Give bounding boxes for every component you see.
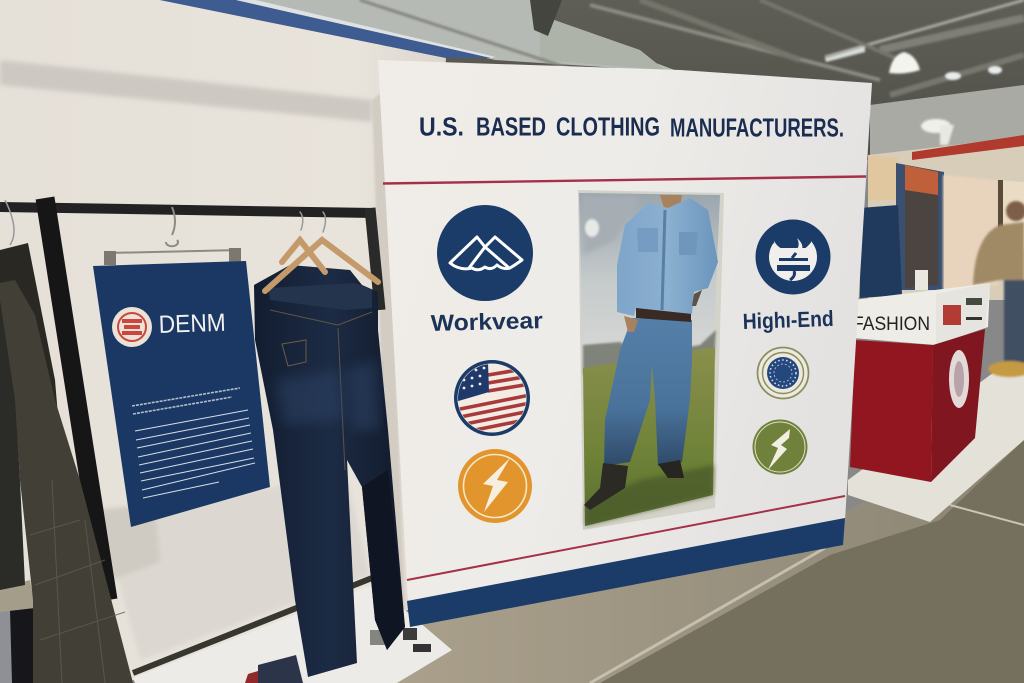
panel base strip <box>407 518 845 627</box>
hangers <box>265 212 378 291</box>
wall behind rack <box>0 0 446 683</box>
counter label: FASHION <box>853 314 930 335</box>
bottom red line <box>407 496 845 580</box>
clothing rack <box>0 198 380 673</box>
background: hall ceiling <box>0 0 1024 160</box>
poster: DENM <box>93 261 270 527</box>
hook and rod for poster <box>104 207 241 265</box>
logo badge <box>112 307 152 347</box>
man's neck <box>660 195 682 208</box>
hanging coat <box>0 200 133 683</box>
heading: MANUFACTURERS. <box>670 112 844 142</box>
main panel <box>378 60 872 627</box>
icon: orange bolt <box>458 449 532 523</box>
belt <box>636 306 691 322</box>
background: neighbouring booth <box>868 135 1024 300</box>
heading: U.S. <box>419 112 464 142</box>
shirt <box>617 198 718 316</box>
photo: man in denim <box>578 190 724 530</box>
poster text lines <box>132 388 255 498</box>
heading: BASED <box>476 112 546 142</box>
top red line <box>383 176 866 184</box>
display base <box>133 585 452 683</box>
background: floor <box>395 350 1024 683</box>
ceiling lamps <box>889 52 1002 145</box>
heading: CLOTHING <box>556 112 660 142</box>
trousers <box>604 318 692 466</box>
icon: high-end <box>756 220 830 294</box>
background: visitor <box>973 201 1024 377</box>
boots <box>584 463 628 510</box>
icon: US flag <box>454 360 530 436</box>
top banner on wall <box>160 0 496 58</box>
poster heading: DENM <box>158 309 226 339</box>
counter: fashion desk <box>850 205 990 482</box>
icon: workwear mountains <box>437 205 533 301</box>
icon: green bolt <box>752 420 808 474</box>
heading <box>419 112 844 142</box>
icon: seal <box>758 348 808 398</box>
hands <box>624 316 638 332</box>
background: far hall wall <box>870 85 1024 165</box>
label: workwear: Workvear <box>430 307 543 336</box>
jeans on hangers <box>254 212 405 677</box>
label: high-end: Highı-End <box>742 306 834 334</box>
